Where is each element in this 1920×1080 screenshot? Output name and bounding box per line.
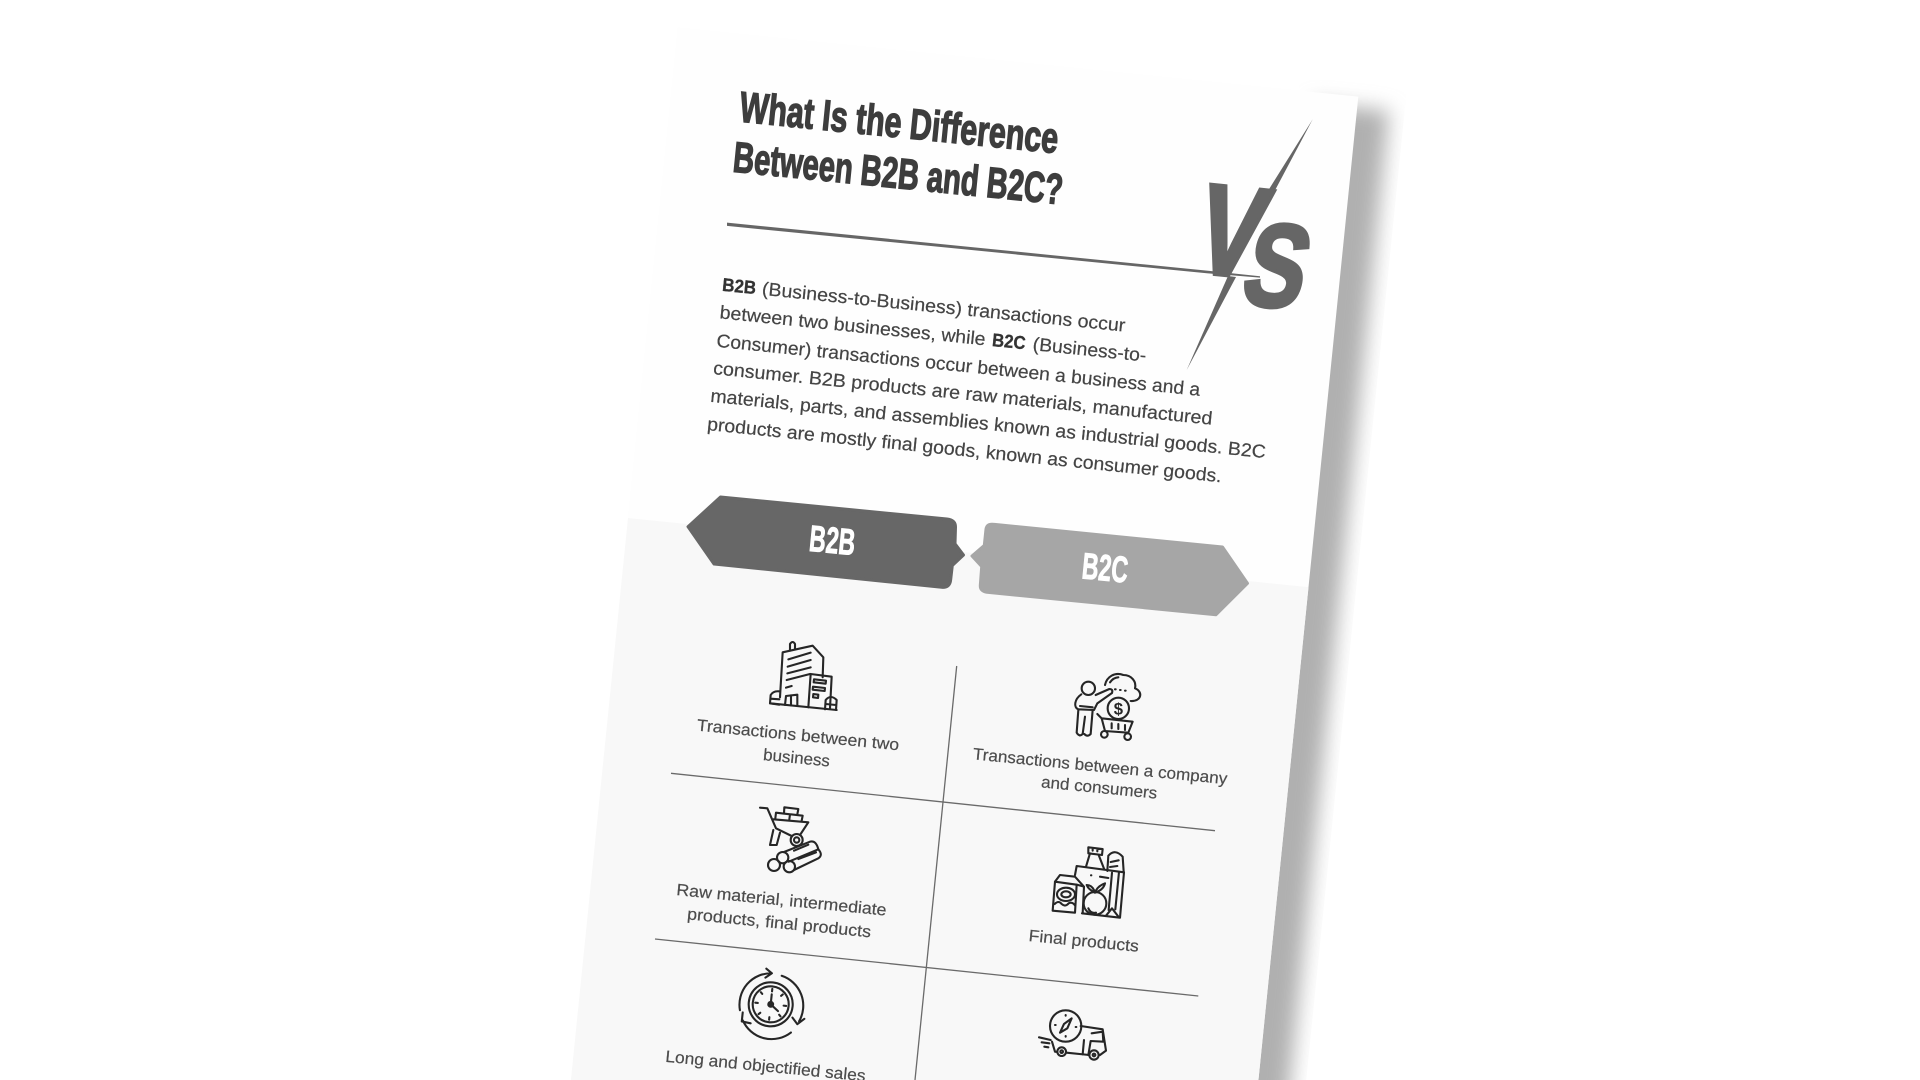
title: What Is the Difference [738,84,1061,163]
intro paragraph [706,274,1267,486]
intro paragraph: consumer. B2B products are raw materials, manufactured [712,357,1213,429]
label: transactions between a company and consumers: Transactions between a company [972,745,1229,788]
VS emblem: S [1232,198,1324,334]
B2B header tag [688,497,964,587]
intro paragraph: materials, parts, and assemblies known as industrial goods. B2C [710,385,1267,462]
label: transactions between two business [696,717,900,771]
VS emblem: V [1182,158,1282,305]
title divider line [727,223,1260,278]
intro paragraph: between two businesses, while [719,301,987,349]
label: transactions between two business: Transactions between two [696,717,900,754]
icon: delivery truck with gauge [1039,1010,1106,1060]
intro paragraph: Consumer) transactions occur between a business and a [716,330,1202,400]
label: raw material, intermediate products, final products: products, final products [686,905,872,941]
title: Between B2B and B2C? [731,134,1065,214]
icon: office building [770,642,837,710]
label: final products: Final products [1028,927,1140,956]
label: raw material, intermediate products, final products [676,881,887,941]
intro paragraph: B2B [721,274,757,298]
panel: infographic card [546,28,1358,1080]
intro paragraph: (Business-to- [1032,333,1147,366]
B2B header tag: B2B [808,518,857,563]
icon: clock with cycle arrows [736,966,809,1042]
panel: comparison background [547,518,1308,1080]
B2C header tag: B2C [1080,545,1130,591]
label: raw material, intermediate products, final products: Raw material, intermediate [676,881,887,920]
card shadow [1182,103,1389,1080]
intro paragraph: (Business-to-Business) transactions occur [761,278,1126,336]
label: transactions between a company and consumers: and consumers [1040,773,1158,803]
intro paragraph: products are mostly final goods, known as consumer goods. [706,413,1223,486]
icon: groceries [1053,847,1124,918]
intro paragraph: B2C [991,329,1027,353]
B2C header tag [972,524,1248,615]
icon: shopper with cart: $ [1114,699,1124,718]
comparison grid lines [655,666,1215,1080]
icon: wheelbarrow and logs [760,807,821,872]
title [731,84,1065,214]
icon: shopper with cart [1075,674,1140,740]
label: transactions between two business: business [762,746,831,771]
VS emblem [1182,119,1324,370]
